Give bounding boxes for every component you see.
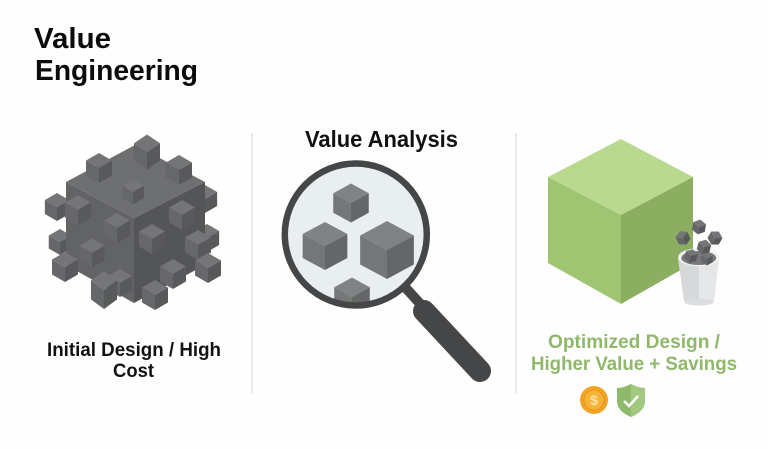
title: Value [34,23,111,55]
label: initial design: Cost [113,361,155,382]
heading: value analysis: Value Analysis [305,126,458,152]
label: optimized design: Optimized Design / [548,332,721,353]
icon: green shield with check [617,384,645,417]
icon: waste bin with removed cubes [674,218,724,306]
label: initial design: Initial Design / High [47,340,221,361]
title: Engineering [35,55,198,87]
label: initial design [47,340,221,382]
icon: magnifying glass with cubes [285,164,480,371]
title [34,23,198,87]
icon: gold coin: $ [590,392,598,408]
icon: gold coin [580,386,608,414]
label: optimized design: Higher Value + Savings [531,354,737,375]
icon: optimized green cube [548,139,693,304]
icon: spiky initial design cube [45,134,221,310]
label: optimized design [531,332,737,375]
